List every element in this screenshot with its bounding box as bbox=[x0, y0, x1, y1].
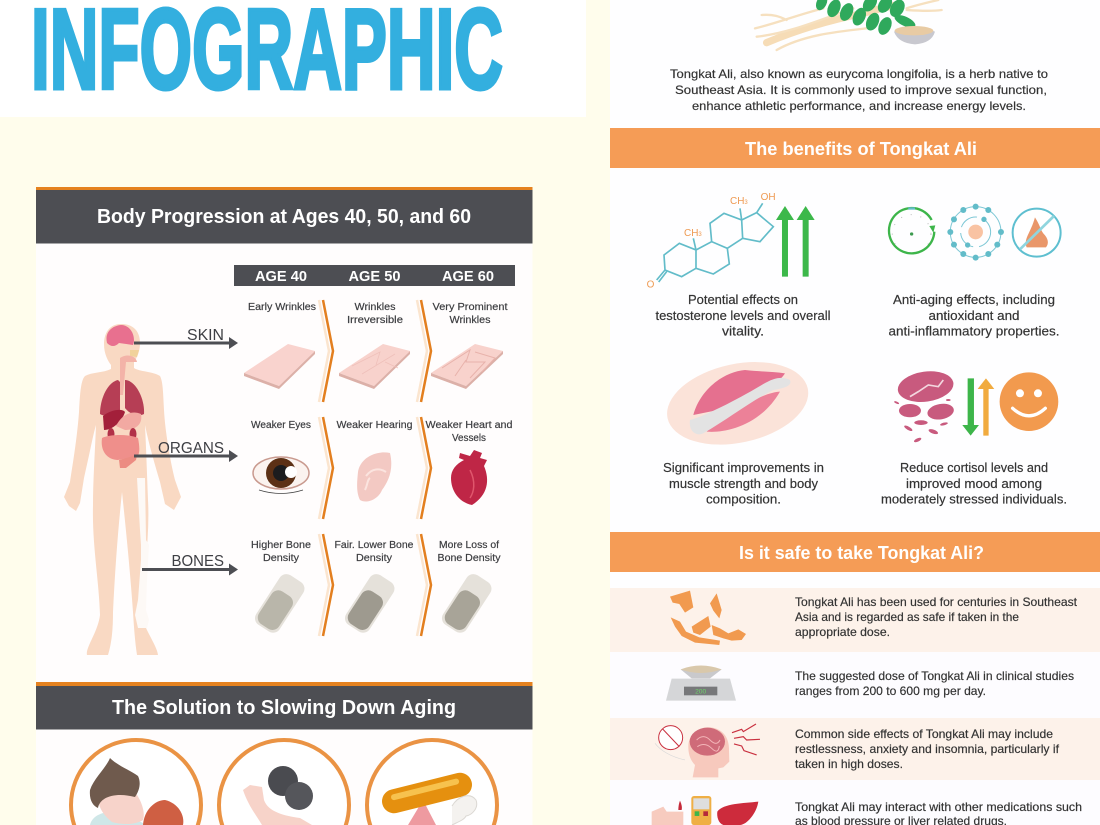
age column header bbox=[234, 265, 515, 286]
row labels: bones bbox=[251, 540, 500, 564]
icon: anti-aging bbox=[889, 204, 1061, 261]
row: history in southeast asia bbox=[610, 588, 1100, 652]
row labels: bones: Fair. Lower Bone bbox=[334, 540, 414, 551]
title bbox=[0, 0, 586, 117]
row labels: skin bbox=[248, 302, 508, 326]
panel: tongkat ali bbox=[610, 0, 1100, 825]
row: interactions bbox=[610, 780, 1100, 825]
arrow: skin: SKIN bbox=[187, 327, 224, 344]
row: side effects: Common side effects of Tongkat Ali may include bbox=[795, 727, 1053, 741]
row: history in southeast asia: Tongkat Ali has been used for centuries in Southeast bbox=[795, 595, 1078, 609]
heading: benefits bbox=[610, 128, 1100, 168]
skin sample: age 50 bbox=[339, 344, 410, 389]
row labels: bones: Density bbox=[263, 553, 299, 564]
text: muscle: muscle strength and body bbox=[669, 477, 819, 491]
age column header: AGE 50 bbox=[348, 268, 400, 285]
text: muscle: composition. bbox=[706, 492, 781, 506]
icon: scale: 200 bbox=[695, 689, 707, 696]
row: interactions: Tongkat Ali may interact with other medications such bbox=[795, 800, 1082, 814]
age column header: AGE 60 bbox=[442, 268, 494, 285]
icon: testosterone molecule: CH3 bbox=[684, 228, 702, 239]
icon: testosterone molecule: O bbox=[647, 279, 655, 290]
row labels: bones: Bone Density bbox=[438, 553, 500, 564]
row labels: bones: More Loss of bbox=[439, 540, 499, 551]
icon: testosterone molecule: CH3 bbox=[730, 196, 748, 207]
row labels: organs bbox=[251, 420, 512, 444]
heading: solution bbox=[36, 682, 532, 730]
panel: body progression bbox=[36, 187, 532, 825]
row labels: skin: Early Wrinkles bbox=[248, 302, 316, 313]
human body figure bbox=[64, 324, 181, 655]
intro text: Tongkat Ali, also known as eurycoma longifolia, is a herb native to bbox=[670, 67, 1048, 81]
intro text: Southeast Asia. It is commonly used to improve sexual function, bbox=[675, 83, 1047, 97]
row: history in southeast asia: Asia and is regarded as safe if taken in the bbox=[795, 610, 1019, 624]
text: anti-aging: antioxidant and bbox=[928, 309, 1020, 323]
icon: cortisol and mood bbox=[894, 368, 1058, 443]
row labels: organs: Vessels bbox=[452, 433, 486, 444]
text: muscle: Significant improvements in bbox=[663, 461, 824, 475]
icon: southeast asia map bbox=[670, 591, 746, 645]
row: dose: ranges from 200 to 600 mg per day. bbox=[795, 684, 986, 698]
text: cortisol bbox=[881, 461, 1067, 506]
icon: bone age 60 bbox=[439, 571, 495, 636]
arrow: bones: BONES bbox=[172, 553, 224, 570]
row labels: bones: Higher Bone bbox=[251, 540, 311, 551]
intro text: enhance athletic performance, and increase energy levels. bbox=[692, 99, 1026, 113]
text: anti-aging: Anti-aging effects, including bbox=[893, 293, 1055, 307]
row labels: organs: Weaker Heart and bbox=[426, 420, 512, 431]
icon: scale bbox=[666, 665, 736, 701]
heading: body progression: Body Progression at Ages 40, 50, and 60 bbox=[97, 206, 471, 228]
text: anti-aging bbox=[888, 293, 1060, 338]
row labels: organs: Weaker Eyes bbox=[251, 420, 311, 431]
row labels: bones: Density bbox=[356, 553, 392, 564]
row: side effects: restlessness, anxiety and insomnia, particularly if bbox=[795, 742, 1060, 756]
age column header: AGE 40 bbox=[255, 268, 307, 285]
row labels: skin: Wrinkles bbox=[354, 302, 396, 313]
intro text bbox=[670, 67, 1048, 113]
icon: sleep bbox=[71, 740, 201, 825]
row: side effects bbox=[610, 718, 1100, 780]
icon: supplements bbox=[367, 740, 497, 825]
arrow: organs: ORGANS bbox=[158, 440, 224, 457]
chevron dividers bbox=[319, 300, 431, 636]
arrow: bones bbox=[142, 553, 238, 576]
text: cortisol: moderately stressed individuals. bbox=[881, 492, 1067, 506]
heading: safety bbox=[610, 532, 1100, 572]
heading: benefits: The benefits of Tongkat Ali bbox=[745, 139, 977, 159]
icon: ear bbox=[357, 452, 391, 502]
row labels: skin: Irreversible bbox=[347, 315, 403, 326]
skin sample: age 60 bbox=[431, 344, 503, 389]
text: testosterone: testosterone levels and overall bbox=[656, 309, 830, 323]
skin sample: age 40 bbox=[244, 344, 315, 389]
icon: testosterone molecule: OH bbox=[761, 192, 776, 203]
row labels: skin: Wrinkles bbox=[450, 315, 490, 326]
icon: glucose meter and liver bbox=[652, 796, 758, 825]
row: history in southeast asia: appropriate dose. bbox=[795, 625, 890, 639]
row: dose bbox=[610, 652, 1100, 718]
icon: exercise bbox=[219, 740, 349, 825]
text: cortisol: improved mood among bbox=[906, 477, 1042, 491]
icon: heart bbox=[451, 450, 487, 505]
text: testosterone: vitality. bbox=[722, 324, 764, 338]
icon: bone age 50 bbox=[342, 571, 398, 636]
text: muscle bbox=[663, 461, 824, 506]
heading: safety: Is it safe to take Tongkat Ali? bbox=[739, 543, 984, 563]
arrow: organs bbox=[134, 440, 238, 462]
row: dose: The suggested dose of Tongkat Ali in clinical studies bbox=[795, 669, 1074, 683]
icon: muscle bbox=[659, 350, 816, 457]
row: side effects: taken in high doses. bbox=[795, 757, 903, 771]
arrow: skin bbox=[134, 327, 238, 349]
icon: tongkat ali roots bbox=[755, 0, 942, 50]
icon: head and brain bbox=[655, 724, 760, 777]
text: testosterone: Potential effects on bbox=[688, 293, 798, 307]
text: cortisol: Reduce cortisol levels and bbox=[900, 461, 1048, 475]
row labels: skin: Very Prominent bbox=[432, 302, 508, 313]
text: anti-aging: anti-inflammatory properties. bbox=[888, 324, 1060, 338]
text: testosterone bbox=[656, 293, 830, 338]
row labels: organs: Weaker Hearing bbox=[336, 420, 412, 431]
heading: body progression bbox=[36, 187, 532, 244]
icon: bone age 40 bbox=[252, 571, 308, 636]
icon: eye bbox=[253, 457, 309, 494]
heading: solution: The Solution to Slowing Down Aging bbox=[112, 697, 456, 719]
icon: testosterone molecule bbox=[647, 192, 815, 290]
